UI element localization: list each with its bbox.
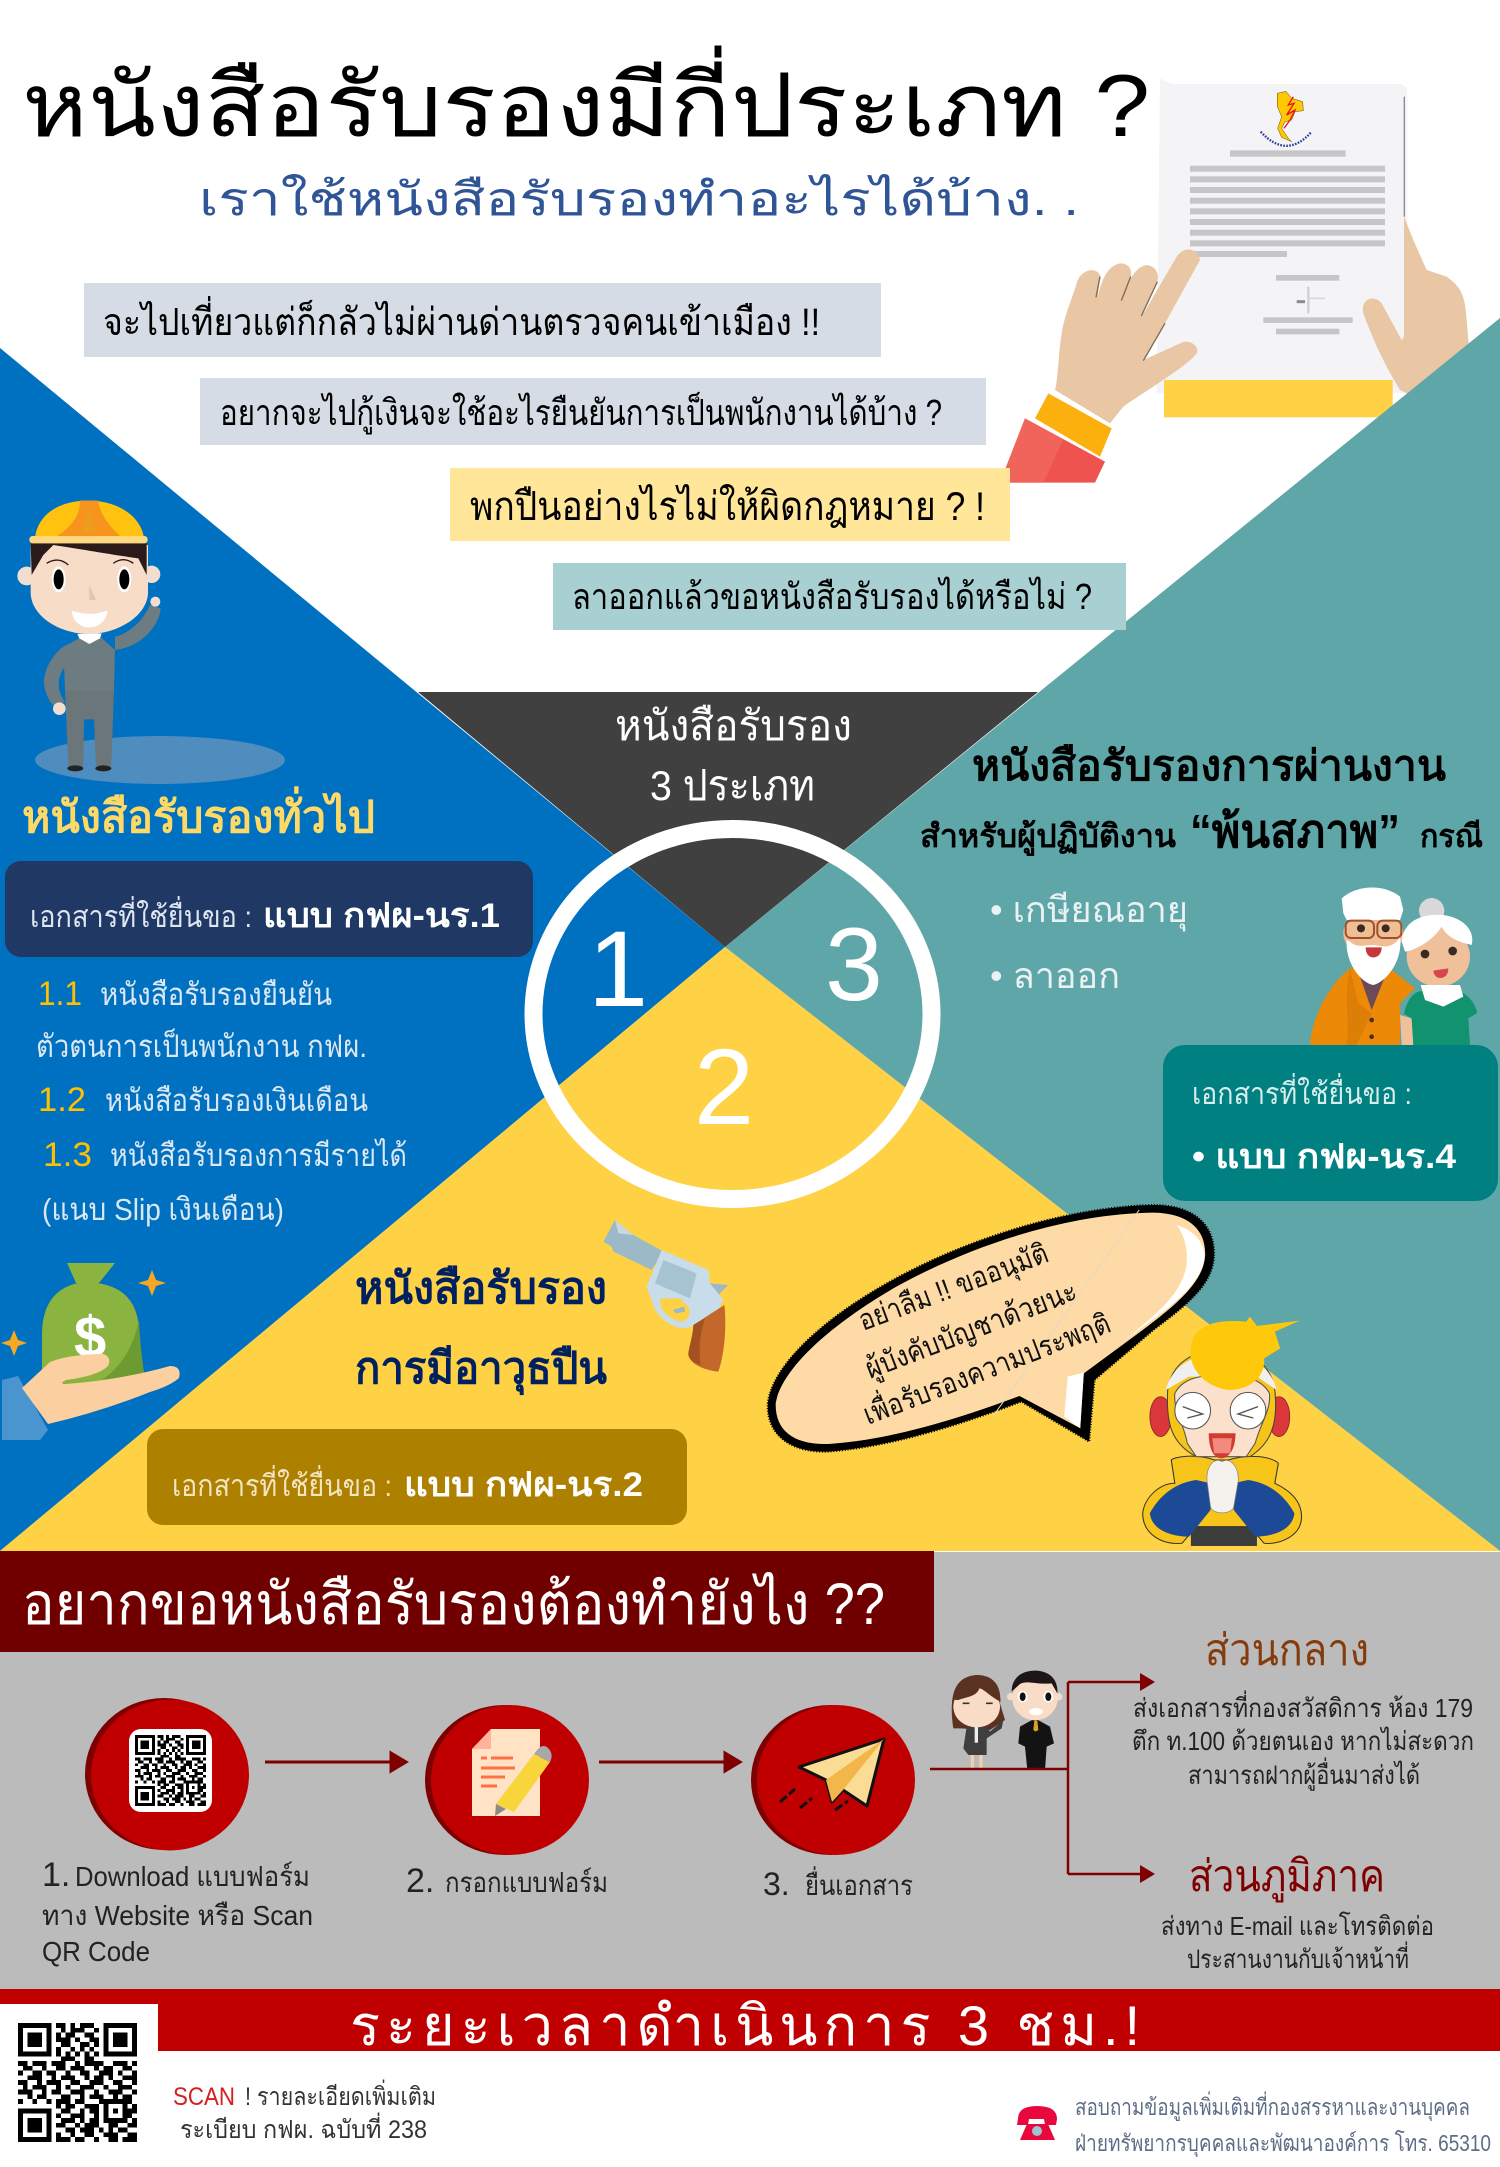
panel: dark centre triangle [418,692,1038,947]
icon: money bag in hand [1,1263,180,1440]
mascot eye lines [1183,1407,1258,1418]
worker hair [31,543,147,575]
mascot seat [1191,1527,1257,1546]
heading: three certificate types [615,702,852,809]
bag shade [94,1320,146,1385]
old man jacket shade [1347,968,1372,1045]
block: central office: สามารถฝากผู้อื่นมาส่งได้ [1188,1757,1420,1791]
man hair [1012,1671,1057,1693]
sleeve [2,1376,48,1440]
woman face [953,1686,1000,1727]
block: regional office: ส่วนภูมิภาค [1189,1852,1385,1903]
mascot praying hands [1207,1460,1238,1513]
heading: three certificate types: 3 ประเภท [650,762,815,809]
icon: mascot greeting [1143,1317,1302,1546]
callout: firearm question [450,468,1010,541]
old man hair [1342,887,1403,920]
heading: three certificate types: หนังสือรับรอง [615,702,852,749]
old woman collar [1421,985,1463,1007]
list: general certificate types: (แนบ Slip เงินเดือน) [42,1192,284,1227]
old man mouth [1366,947,1382,957]
step 2 label: กรอกแบบฟอร์ม [445,1867,608,1898]
frame [647,1250,723,1328]
heading: service certificate: หนังสือรับรองการผ่านงาน [972,742,1446,789]
left hand finger lines [1096,277,1165,361]
ring around numbers [534,829,932,1199]
certificate text lines [1190,150,1385,334]
man smile [1029,1708,1043,1715]
old man jacket [1310,968,1415,1045]
panel: yellow firearm certificate background [0,947,1500,1551]
step 2 label [406,1862,608,1900]
step 3 label [763,1866,913,1902]
step 3: submit [751,1705,915,1902]
icon: paper plane [780,1739,884,1810]
panel: how to request background [0,1552,1500,1990]
list: retirement cases: • เกษียณอายุ [990,889,1188,932]
woman suit [963,1720,1003,1755]
block: central office: ส่วนกลาง [1205,1626,1369,1675]
text: contact information [1075,2091,1491,2157]
bubble text [854,1238,1115,1432]
subheading: for retired staff [920,805,1483,857]
block: regional office: ส่งทาง E-mail และโทรติดต่อ [1161,1911,1434,1941]
certificate yellow band [1164,380,1393,417]
worker shadow [35,736,285,784]
step 3 label: 3. [763,1866,790,1902]
panel: service certificate form [1163,1045,1498,1201]
callout: loan question [200,378,986,445]
old woman arm [1400,1015,1413,1045]
old man glasses [1346,921,1401,938]
list: general certificate types: 1.3 [43,1136,92,1174]
panel: service certificate form: เอกสารที่ใช้ยื่นขอ : [1192,1073,1412,1111]
old man face [1343,910,1403,957]
subheading: for retired staff: สำหรับผู้ปฏิบัติงาน [920,818,1176,857]
text: scan for details [173,2079,436,2144]
man suit [1018,1718,1054,1770]
icon: two office staff [952,1671,1062,1770]
bubble text: เพื่อรับรองความประพฤติ [857,1303,1115,1432]
man face [1012,1676,1058,1720]
panel: firearm certificate form: เอกสารที่ใช้ยื่นขอ : [172,1465,392,1503]
list: general certificate types: 1.1 [38,975,82,1013]
worker face [31,545,148,634]
callout: firearm question: พกปืนอย่างไรไม่ให้ผิดกฎหมาย ? ! [470,483,985,529]
worker helmet [29,501,148,543]
heading: how to request [0,1551,934,1652]
text: scan for details: ! รายละเอียดเพิ่มเติม [245,2079,436,2111]
mascot blue arms [1150,1480,1294,1537]
title: หนังสือรับรองมีกี่ประเภท ? [22,45,1150,155]
callout: resignation question: ลาออกแล้วขอหนังสือรับรองได้หรือไม่ ? [572,576,1092,617]
bubble text: อย่าลืม !! ขออนุมัติ [854,1238,1053,1338]
list: general certificate types: หนังสือรับรองเงินเดือน [105,1083,368,1118]
list: general certificate types: หนังสือรับรองการมีรายได้ [110,1138,407,1173]
heading: general certificate: หนังสือรับรองทั่วไป [22,786,375,842]
panel: firearm certificate form [147,1429,687,1525]
old woman bun [1419,898,1444,923]
callout: resignation question [553,563,1126,630]
bag [42,1263,145,1385]
heading: how to request: อยากขอหนังสือรับรองต้องทำยังไง ?? [22,1571,885,1637]
worker hands [53,597,160,715]
number 3: 3 [825,907,883,1023]
worker shirt [63,637,115,691]
arrow: step 2 to 3 [599,1753,740,1771]
mascot hair [1190,1317,1300,1390]
panel: blue general certificate background [0,348,725,1551]
icon: elderly couple [1310,887,1477,1045]
old man vest [1360,977,1385,1010]
list: retirement cases: • ลาออก [990,955,1120,996]
panel: service certificate form: • แบบ กฟผ-นร.4 [1192,1138,1456,1176]
icon: telephone [1017,2106,1057,2140]
QR code: regulations [0,2004,158,2167]
step 1: download [42,1698,313,1967]
text: scan for details: SCAN [173,2083,235,2111]
woman fringe [955,1677,1001,1702]
list: general certificate types: 1.2 [38,1081,86,1119]
step 1 label: QR Code [42,1936,150,1967]
sparkles [1,1270,166,1356]
left sleeve highlight [1000,418,1063,483]
heading: firearm certificate: หนังสือรับรอง [355,1264,607,1313]
heading: firearm certificate [355,1264,607,1396]
hammer [710,1283,728,1295]
worker ears [17,566,160,585]
step 3 disc [751,1705,915,1855]
old woman dress [1404,991,1477,1045]
mascot helmet top [1166,1353,1277,1390]
list: general certificate types: ตัวตนการเป็นพนักงาน กฟผ. [36,1028,367,1064]
trigger [673,1307,685,1313]
mascot helmet [1167,1350,1276,1457]
step 2: fill form [406,1705,608,1900]
icon: form and pencil [472,1729,552,1816]
step 1 label: 1. [42,1856,70,1894]
old woman eyes [1421,947,1457,958]
banner: processing time: ระยะเวลาดำเนินการ 3 ชม.! [350,1994,1140,2057]
woman blouse [975,1726,978,1743]
worker eyes [47,560,133,592]
trigger guard opening [660,1298,690,1322]
callout: loan question: อยากจะไปกู้เงินจะใช้อะไรยืนยันการเป็นพนักงานได้บ้าง ? [220,390,942,435]
left cuff [1035,393,1112,457]
mascot armour [1143,1456,1302,1544]
callout: immigration question [84,283,881,357]
step 1 QR card [129,1729,212,1812]
man tie [1033,1721,1038,1732]
woman hair back [952,1675,1005,1730]
mascot ears [1150,1397,1290,1437]
icon: revolver [603,1220,728,1372]
step 1 label: Download แบบฟอร์ม [75,1861,310,1892]
worker nose [89,585,96,600]
list: general certificate types: หนังสือรับรองยืนยัน [100,977,332,1012]
grip [688,1305,725,1372]
connector arrows to offices [930,1673,1155,1883]
step 2 label: 2. [406,1862,434,1900]
mascot mouth [1209,1433,1236,1458]
mascot eyes [1175,1392,1266,1429]
icon: worker character [17,501,285,784]
worker trousers [65,690,114,766]
hand [22,1354,180,1424]
old man buttons [1369,1018,1374,1039]
certificate edge [1402,97,1406,217]
worker collar [77,633,102,644]
old woman face [1407,927,1470,987]
woman eyes [963,1701,993,1706]
arrow: step 1 to 2 [265,1753,406,1771]
number 2: 2 [694,1026,754,1147]
barrel highlight [615,1220,633,1235]
number 1: 1 [588,908,648,1029]
heading: firearm certificate: การมีอาวุธปืน [355,1344,607,1396]
callout: speech bubble reminder [768,1205,1214,1452]
list: retirement cases [990,889,1188,996]
step 2 disc [425,1705,589,1855]
barrel [603,1220,663,1270]
block: regional office: ประสานงานกับเจ้าหน้าที่ [1187,1941,1409,1974]
subtitle: เราใช้หนังสือรับรองทำอะไรได้บ้าง. . [199,173,1079,225]
panel: general certificate form [5,861,533,957]
worker arms [44,605,161,707]
man ears [1007,1693,1062,1700]
step 1 disc [85,1698,249,1850]
old man beard [1347,937,1400,985]
mascot face [1175,1375,1270,1457]
bubble outline [768,1205,1214,1452]
grip shade [688,1318,705,1365]
right hand [1363,217,1470,397]
panel: teal service certificate background [725,318,1500,1551]
step 3 label: ยื่นเอกสาร [805,1866,913,1901]
panel: general certificate form: เอกสารที่ใช้ยื่นขอ : [30,896,252,934]
text: scan for details: ระเบียบ กฟผ. ฉบับที่ 238 [180,2112,427,2144]
icon: hands holding certificate [1000,78,1470,483]
subheading: for retired staff: กรณี [1420,818,1483,854]
block: regional office [1161,1852,1434,1974]
list: general certificate types [36,975,407,1227]
worker smile [72,611,107,627]
panel: general certificate form: แบบ กฟผ-นร.1 [263,897,500,935]
cylinder [655,1260,697,1298]
callout: immigration question: จะไปเที่ยวแต่ก็กลัวไม่ผ่านด่านตรวจคนเข้าเมือง !! [103,296,820,344]
subheading: for retired staff: “พ้นสภาพ” [1190,805,1400,857]
bubble text: ผู้บังคับบัญชาด้วยนะ [861,1275,1082,1386]
left hand [1055,250,1200,423]
banner: processing time [0,1989,1500,2057]
old woman mouth [1433,968,1448,978]
worker shoes [67,765,111,771]
certificate logo [1261,91,1312,146]
step 1 label: ทาง Website หรือ Scan [42,1900,313,1931]
old woman hair [1402,915,1472,952]
man eyes [1018,1691,1053,1702]
woman legs [971,1755,983,1768]
certificate paper [1157,78,1407,393]
block: central office [1132,1626,1474,1791]
mascot tongue [1212,1438,1232,1453]
left sleeve [1000,418,1105,483]
step 1 label [42,1856,313,1967]
panel: firearm certificate form: แบบ กฟผ-นร.2 [404,1466,643,1504]
dollar sign: $ [74,1305,106,1370]
